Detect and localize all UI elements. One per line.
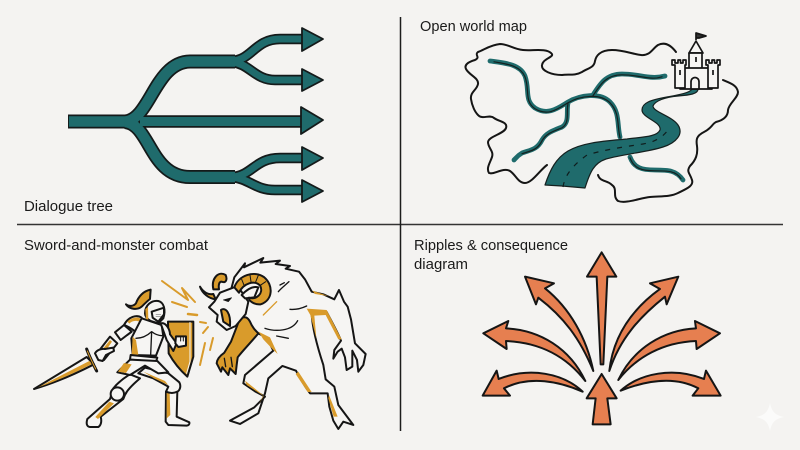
heading: dialogue tree: Dialogue tree <box>24 198 113 215</box>
body <box>228 258 366 429</box>
diagram: radiating arrows <box>483 252 721 424</box>
torso details <box>265 282 307 338</box>
streams <box>490 61 683 180</box>
illustration: monster <box>200 258 366 429</box>
upper left arrow <box>525 277 593 371</box>
impact sparks <box>162 281 213 365</box>
middle right arrow <box>618 321 720 380</box>
rear arm <box>95 316 143 361</box>
panel: open world map <box>420 18 738 202</box>
lower left arrow <box>483 371 583 396</box>
front leg <box>138 368 189 426</box>
belt and skirt <box>130 355 157 362</box>
helmet <box>145 301 164 323</box>
heading: sword-and-monster combat: Sword-and-monster combat <box>24 237 209 254</box>
panel: ripples and consequence diagram <box>414 237 721 424</box>
diagram: branching arrows <box>68 28 323 202</box>
left arm <box>217 317 258 375</box>
small horn <box>213 274 226 289</box>
plume <box>126 290 151 309</box>
sword <box>34 349 97 389</box>
illustration: knight <box>34 290 193 427</box>
lower right arrow <box>621 371 721 396</box>
icon: castle <box>672 33 720 89</box>
ear <box>242 287 258 298</box>
heading: ripples and consequence diagram: diagram <box>414 256 468 273</box>
bottom source arrow <box>587 374 617 424</box>
upper right arrow <box>609 277 678 371</box>
central top arrow <box>587 252 616 364</box>
big horn <box>234 274 271 304</box>
front arm and fist <box>161 323 177 351</box>
panel: sword-and-monster combat <box>24 237 366 429</box>
body shading <box>245 291 342 417</box>
main river <box>545 89 698 188</box>
map coastline <box>465 44 738 202</box>
panel: dialogue tree <box>24 28 323 215</box>
rear leg <box>87 374 140 427</box>
sparkle watermark <box>756 403 784 431</box>
heading: open world map: Open world map <box>420 18 527 35</box>
shield <box>168 322 193 377</box>
middle left arrow <box>483 321 585 381</box>
head <box>209 286 248 330</box>
heading: ripples and consequence diagram: Ripples & consequence <box>414 237 568 254</box>
torso <box>131 318 163 356</box>
